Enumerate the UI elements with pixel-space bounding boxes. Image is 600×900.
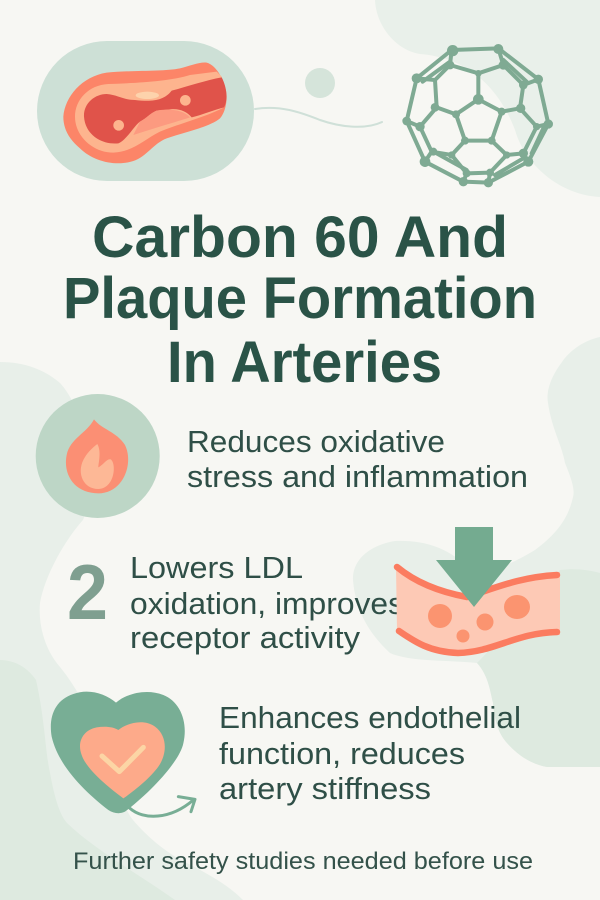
icon: carbon 60 molecule: [402, 44, 553, 187]
text: benefit 3: function, reduces: [219, 736, 465, 771]
panel: artery background: [37, 41, 254, 181]
text: benefit 2: receptor activity: [130, 620, 361, 655]
number 2: 2: [67, 548, 108, 636]
text: benefit 2: Lowers LDL: [130, 550, 303, 585]
icon: flame in circle: [36, 394, 160, 518]
icon: heart with check and arrow: [51, 692, 195, 816]
icon: artery cross-section with plaque: [63, 63, 227, 163]
text: benefit 3: [219, 700, 521, 806]
text: benefit 2: oxidation, improves: [130, 586, 404, 621]
arrow: downward: [436, 527, 512, 607]
text: benefit 1: stress and inflammation: [187, 459, 528, 494]
text: benefit 1: [187, 424, 528, 494]
title: In Arteries: [167, 330, 442, 395]
small decorative circle: [305, 68, 335, 98]
title: Plaque Formation: [63, 266, 537, 331]
title: [63, 205, 537, 395]
icon: vessel with down arrow: [396, 527, 560, 653]
connector line: [255, 108, 382, 127]
text: benefit 2: [130, 550, 404, 655]
text: benefit 1: Reduces oxidative: [187, 424, 445, 459]
footer note: Further safety studies needed before use: [73, 848, 533, 875]
title: Carbon 60 And: [92, 205, 508, 270]
artery illustration: [37, 41, 254, 181]
vessel wall and particles: [396, 567, 560, 653]
text: benefit 3: Enhances endothelial: [219, 700, 521, 735]
text: benefit 3: artery stiffness: [219, 771, 431, 806]
